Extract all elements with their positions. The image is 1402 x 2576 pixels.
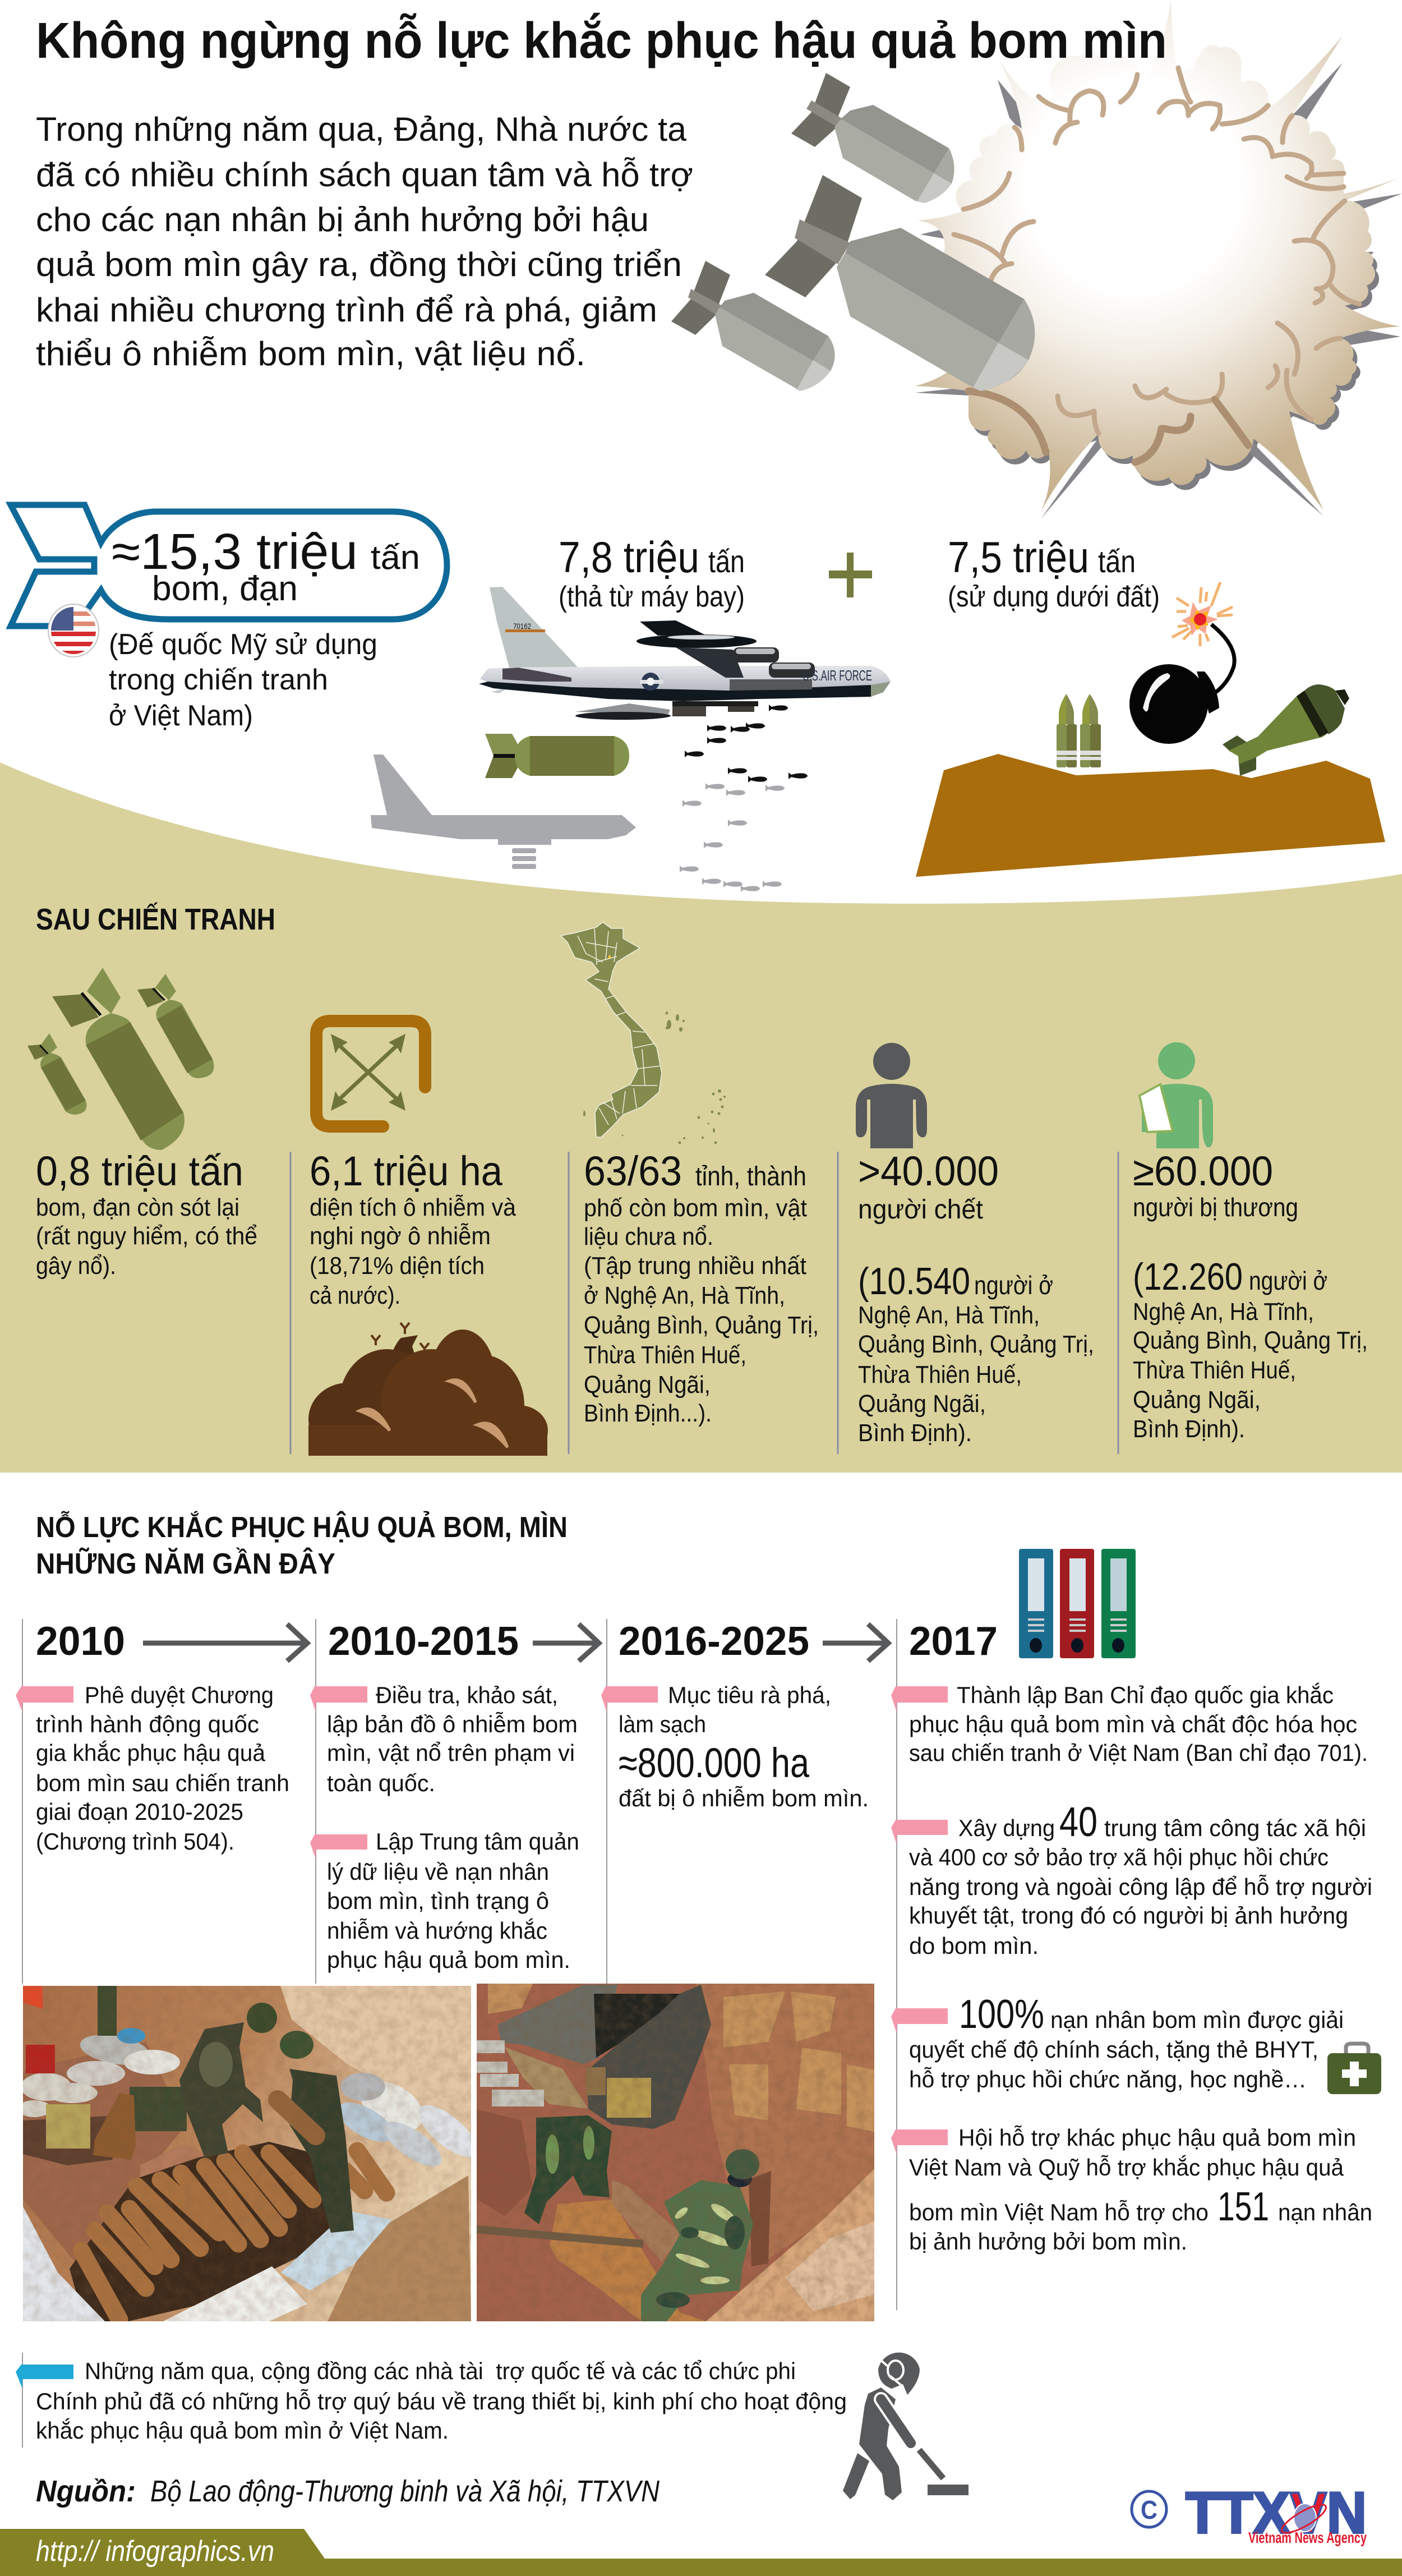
stat column: 63 of 63 provinces: Quảng Bình, Quảng Trị, (584, 1312, 819, 1339)
timeline 2017 text: phục hậu quả bom mìn và chất độc hóa học (909, 1711, 1357, 1737)
intro paragraph: cho các nạn nhân bị ảnh hưởng bởi hậu (36, 201, 649, 238)
stat column: over 60,000 injured: (12.260 (1133, 1255, 1243, 1298)
stat column: over 60,000 injured: Quảng Ngãi, (1133, 1386, 1261, 1414)
heading: after the war: SAU CHIẾN TRANH (36, 903, 275, 936)
stat column: 63 of 63 provinces: Bình Định...). (584, 1400, 712, 1427)
timeline 2010-2015 text: phục hậu quả bom mìn. (327, 1947, 570, 1973)
icon: gray plane silhouette (371, 755, 636, 869)
icon: falling gray bombs (671, 73, 1035, 391)
illustration: B-52 bomber: U.S.AIR FORCE (803, 667, 872, 684)
sandbags (17, 2028, 486, 2321)
footer bar: http:// infographics.vn (36, 2535, 274, 2568)
timeline 2010 text: gia khắc phục hậu quả (36, 1740, 266, 1766)
US usage note: trong chiến tranh (109, 664, 328, 696)
stat: 7.8 million tons: tấn (708, 544, 745, 579)
timeline 2017 text: 151 (1217, 2184, 1269, 2229)
timeline 2017 text: khuyết tật, trong đó có người bị ảnh hưởng (909, 1902, 1348, 1929)
timeline 2017 text: trung tâm công tác xã hội (1104, 1815, 1366, 1841)
timeline 2010-2015 text: lý dữ liệu về nạn nhân (327, 1859, 549, 1885)
stat column: 63 of 63 provinces: Thừa Thiên Huế, (584, 1341, 746, 1369)
illustration: B-52 bomber: 70162 (513, 622, 531, 631)
stat column: over 40,000 dead: Quảng Bình, Quảng Trị, (858, 1331, 1094, 1358)
icon: contaminated area bracket with arrows (316, 1021, 425, 1126)
illustration: B-52 bomber (479, 587, 891, 720)
icon: round black bomb with fuse (1129, 582, 1234, 744)
timeline 2010-2015 text: Điều tra, khảo sát, (376, 1682, 558, 1708)
heading: recent efforts (36, 1511, 568, 1580)
stat column: over 60,000 injured: người bị thương (1133, 1193, 1298, 1222)
timeline 2016-2025 text (601, 1682, 869, 1811)
explosion illustration (915, 0, 1402, 519)
stat: 7.8 million tons: (thả từ máy bay) (559, 581, 745, 613)
icon: plus sign (829, 553, 872, 597)
timeline 2010-2015 text: lập bản đồ ô nhiễm bom (327, 1711, 578, 1737)
photo: soldiers stacking shells (17, 1986, 486, 2321)
soldier right (278, 2031, 354, 2233)
stat: 7.5 million tons (948, 532, 1160, 613)
timeline 2010 text: trình hành động quốc (36, 1711, 259, 1737)
timeline 2017 text: 40 (1059, 1798, 1097, 1845)
stat column: over 60,000 injured: Quảng Bình, Quảng Trị, (1133, 1327, 1368, 1354)
stat column: over 40,000 dead (858, 1148, 1094, 1447)
timeline 2010-2015 text: Lập Trung tâm quản (376, 1828, 579, 1855)
icon: mine-clearing worker (843, 2353, 969, 2500)
international support note: Những năm qua, cộng đồng các nhà tài trợ quốc tế và các tổ chức phi (85, 2358, 796, 2384)
stat column: over 60,000 injured: Bình Định). (1133, 1415, 1245, 1443)
timeline 2010-2015 text: toàn quốc. (327, 1770, 435, 1796)
stat: 7.5 million tons: (sử dụng dưới đất) (948, 581, 1160, 613)
US usage note: (Đế quốc Mỹ sử dụng (109, 628, 377, 661)
timeline 2017 text: và 400 cơ sở bảo trợ xã hội phục hồi chức (909, 1844, 1329, 1870)
soldier left (179, 2003, 277, 2158)
title: Không ngừng nỗ lực khắc phục hậu quả bom mìn (36, 12, 1167, 69)
timeline 2010-2015 text: mìn, vật nổ trên phạm vi (327, 1740, 575, 1766)
TTXVN logo: TTXVN (1186, 2481, 1367, 2546)
international support note (16, 2353, 847, 2448)
intro paragraph: khai nhiều chương trình để rà phá, giảm (36, 291, 657, 329)
timeline 2017 text: bị ảnh hưởng bởi bom mìn. (909, 2228, 1187, 2255)
stat column: over 60,000 injured (1133, 1148, 1368, 1443)
stat column: over 60,000 injured: người ở (1249, 1266, 1327, 1295)
timeline 2010-2015 text: bom mìn, tình trạng ô (327, 1888, 549, 1914)
international support note: khắc phục hậu quả bom mìn ở Việt Nam. (36, 2417, 449, 2444)
stat column: 63 of 63 provinces: liệu chưa nổ. (584, 1223, 713, 1250)
timeline 2010 text: bom mìn sau chiến tranh (36, 1770, 289, 1796)
stat column: over 40,000 dead: Quảng Ngãi, (858, 1390, 986, 1418)
timeline 2017 text: Xây dựng (958, 1815, 1055, 1841)
stat column: 0.8 million tons remaining: 0,8 triệu tấn (36, 1148, 243, 1194)
timeline 2017 text: quyết chế độ chính sách, tặng thẻ BHYT, (909, 2036, 1318, 2063)
stat: 7.5 million tons: tấn (1098, 544, 1136, 579)
stat column: over 40,000 dead: Nghệ An, Hà Tĩnh, (858, 1301, 1040, 1329)
international support note: Chính phủ đã có những hỗ trợ quý báu về trang thiết bị, kinh phí cho hoạt động (36, 2388, 847, 2414)
footer bar (0, 2529, 1402, 2576)
intro paragraph: Trong những năm qua, Đảng, Nhà nước ta (36, 111, 687, 148)
stat column: over 60,000 injured: Nghệ An, Hà Tĩnh, (1133, 1298, 1314, 1326)
stat column: 6.1 million hectares: (18,71% diện tích (310, 1252, 485, 1280)
icon: injured person green (1140, 1042, 1213, 1148)
source: Nguồn: (36, 2474, 136, 2508)
icon: falling gray bombs trail (680, 783, 785, 892)
US usage note: ở Việt Nam) (109, 700, 253, 732)
timeline 2016-2025 text: làm sạch (619, 1711, 706, 1737)
arrows between years (143, 1624, 888, 1661)
intro paragraph (36, 111, 693, 372)
stat column: 63 of 63 provinces: ở Nghệ An, Hà Tĩnh, (584, 1282, 785, 1309)
stat column: over 40,000 dead: người ở (974, 1271, 1053, 1300)
US usage note (109, 628, 377, 732)
timeline 2017 text: sau chiến tranh ở Việt Nam (Ban chỉ đạo 701). (909, 1740, 1368, 1766)
stat: 7.8 million tons: 7,8 triệu (559, 532, 699, 582)
bomb-shaped callout: 15.3 million tons: tấn (371, 539, 420, 576)
map of Vietnam (561, 922, 726, 1144)
icon: green bomb (485, 734, 629, 778)
timeline 2016-2025 text: Mục tiêu rà phá, (668, 1682, 831, 1708)
timeline 2017 text: nạn nhân (1278, 2199, 1372, 2225)
intro paragraph: thiểu ô nhiễm bom mìn, vật liệu nổ. (36, 335, 585, 372)
icon: medical kit (1327, 2044, 1381, 2094)
intro paragraph: quả bom mìn gây ra, đồng thời cũng triển (36, 246, 682, 283)
timeline 2017 text: nạn nhân bom mìn được giải (1050, 2007, 1344, 2033)
bomb-shaped callout: 15.3 million tons (11, 505, 447, 626)
timeline 2010-2015 text (310, 1682, 579, 1973)
timeline 2010 text: (Chương trình 504). (36, 1828, 234, 1855)
stat column: over 60,000 injured: Thừa Thiên Huế, (1133, 1356, 1296, 1384)
timeline 2017 text: năng trong và ngoài công lập để hỗ trợ người (909, 1874, 1372, 1900)
timeline years (36, 1619, 998, 1664)
stat column: 0.8 million tons remaining: gây nổ). (36, 1252, 116, 1280)
timeline 2017 text: 100% (959, 1992, 1044, 2037)
timeline 2017 text: do bom mìn. (909, 1933, 1039, 1959)
timeline column lines (22, 1619, 897, 2310)
stat column: 63 of 63 provinces: (Tập trung nhiều nhất (584, 1252, 806, 1280)
icon: person dark (856, 1043, 927, 1148)
excavator bucket (477, 1985, 711, 2129)
timeline years: 2010-2015 (328, 1619, 519, 1664)
stat column: 63 of 63 provinces: phố còn bom mìn, vật (584, 1194, 807, 1222)
timeline 2010-2015 text: nhiễm và hướng khắc (327, 1917, 547, 1944)
stat: 7.5 million tons: 7,5 triệu (948, 532, 1089, 582)
timeline 2010 text: giai đoạn 2010-2025 (36, 1798, 243, 1825)
timeline years: 2017 (909, 1619, 998, 1664)
timeline years: 2010 (36, 1619, 125, 1664)
stat column: 0.8 million tons remaining: bom, đạn còn sót lại (36, 1194, 239, 1221)
heading: recent efforts: NỖ LỰC KHẮC PHỤC HẬU QUẢ BOM, MÌN (36, 1511, 568, 1544)
column dividers (290, 1152, 1118, 1454)
beige section background (0, 762, 1402, 1473)
bomb-shaped callout: 15.3 million tons: bom, đạn (152, 569, 298, 608)
icon: bullets (1057, 694, 1101, 767)
stat column: 63 of 63 provinces: 63/63 (584, 1148, 682, 1194)
timeline 2010 text (16, 1682, 289, 1855)
timeline 2017 text: Hội hỗ trợ khác phục hậu quả bom mìn (958, 2124, 1356, 2151)
soldier in trench (524, 2115, 612, 2224)
stat column: over 40,000 dead: (10.540 (858, 1260, 970, 1303)
source: Bộ Lao động-Thương binh và Xã hội, TTXVN (150, 2474, 660, 2508)
timeline 2016-2025 text: đất bị ô nhiễm bom mìn. (619, 1785, 869, 1811)
icon: US flag badge (48, 604, 99, 657)
soldier front (641, 2149, 759, 2321)
stat column: over 40,000 dead: >40.000 (858, 1148, 999, 1194)
timeline 2017 text: bom mìn Việt Nam hỗ trợ cho (909, 2199, 1209, 2225)
stat column: over 40,000 dead: Bình Định). (858, 1419, 972, 1447)
icon: olive bombs (27, 968, 214, 1150)
timeline 2017 text (891, 1682, 1372, 2255)
stat column: 6.1 million hectares: cả nước). (310, 1282, 400, 1309)
stat column: 0.8 million tons remaining: (rất nguy hiểm, có thể (36, 1222, 257, 1250)
photo: soldiers excavating bomb (477, 1984, 874, 2321)
timeline 2017 text: Việt Nam và Quỹ hỗ trợ khắc phục hậu quả (909, 2154, 1344, 2181)
icon: brown ground with unexploded ordnance (916, 582, 1385, 877)
intro paragraph: đã có nhiều chính sách quan tâm và hỗ trợ (36, 156, 693, 194)
stat column: 6.1 million hectares (310, 1148, 516, 1309)
stat: 7.8 million tons (559, 532, 745, 613)
icon: dirt pile (308, 1323, 548, 1456)
timeline 2017 text: hỗ trợ phục hồi chức năng, học nghề… (909, 2066, 1307, 2092)
timeline 2017 text: Thành lập Ban Chỉ đạo quốc gia khắc (957, 1682, 1334, 1708)
icon: mortar shell (1223, 684, 1349, 776)
shells (81, 2151, 386, 2320)
heading: recent efforts: NHỮNG NĂM GẦN ĐÂY (36, 1547, 335, 1580)
stat column: over 40,000 dead: Thừa Thiên Huế, (858, 1361, 1022, 1388)
stat column: over 40,000 dead: người chết (858, 1195, 983, 1225)
stat column: 6.1 million hectares: nghi ngờ ô nhiễm (310, 1222, 491, 1250)
timeline 2016-2025 text: ≈800.000 ha (619, 1740, 810, 1786)
bomb-shaped callout: 15.3 million tons: ≈15,3 triệu (112, 524, 358, 580)
timeline years: 2016-2025 (619, 1619, 809, 1664)
stat column: 63 of 63 provinces: tỉnh, thành (695, 1162, 806, 1192)
stat column: 63 of 63 provinces (584, 1148, 819, 1427)
stat column: 0.8 million tons remaining (36, 1148, 257, 1280)
icon: binders (1019, 1549, 1136, 1658)
icon: falling black bombs (685, 705, 808, 783)
stat column: 63 of 63 provinces: Quảng Ngãi, (584, 1371, 711, 1399)
TTXVN logo: C (1141, 2495, 1157, 2524)
stat column: over 60,000 injured: ≥60.000 (1133, 1148, 1273, 1194)
stat column: 6.1 million hectares: diện tích ô nhiễm và (310, 1194, 516, 1221)
stat column: 6.1 million hectares: 6,1 triệu ha (310, 1148, 503, 1194)
timeline 2010 text: Phê duyệt Chương (85, 1682, 274, 1708)
